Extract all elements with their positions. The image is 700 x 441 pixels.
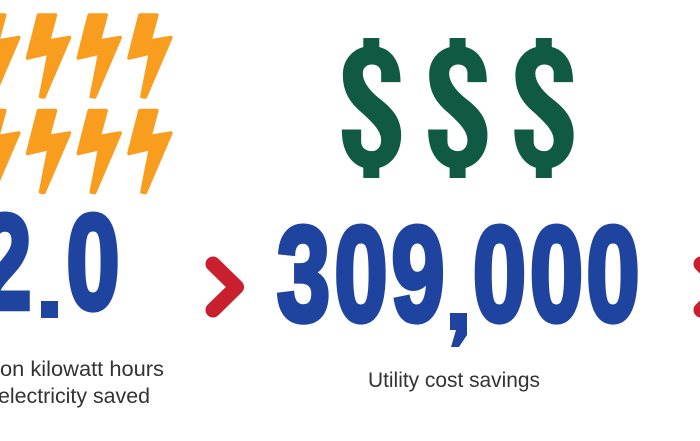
stat: 2.0: 0 (66, 186, 120, 337)
stat: 309,000: 3 (277, 198, 330, 349)
stat: 309,000: 0 (586, 198, 640, 349)
label: utility cost savings: Utility cost savings (368, 369, 540, 392)
label: kilowatt hours saved: electricity saved (0, 385, 150, 408)
icon group: lightning bolts (0, 15, 171, 192)
label: kilowatt hours saved (0, 358, 164, 408)
arrow: chevron left (213, 264, 236, 310)
stat: 309,000 (277, 198, 640, 349)
stat: 309,000: 0 (530, 198, 583, 349)
stat: 309,000: 0 (334, 198, 388, 349)
icon group: dollar signs (342, 38, 573, 178)
stat: 2.0 (0, 186, 120, 337)
stat: 309,000: 9 (391, 198, 445, 349)
stat: 309,000: 0 (473, 198, 526, 349)
label: kilowatt hours saved: on kilowatt hours (0, 358, 164, 381)
